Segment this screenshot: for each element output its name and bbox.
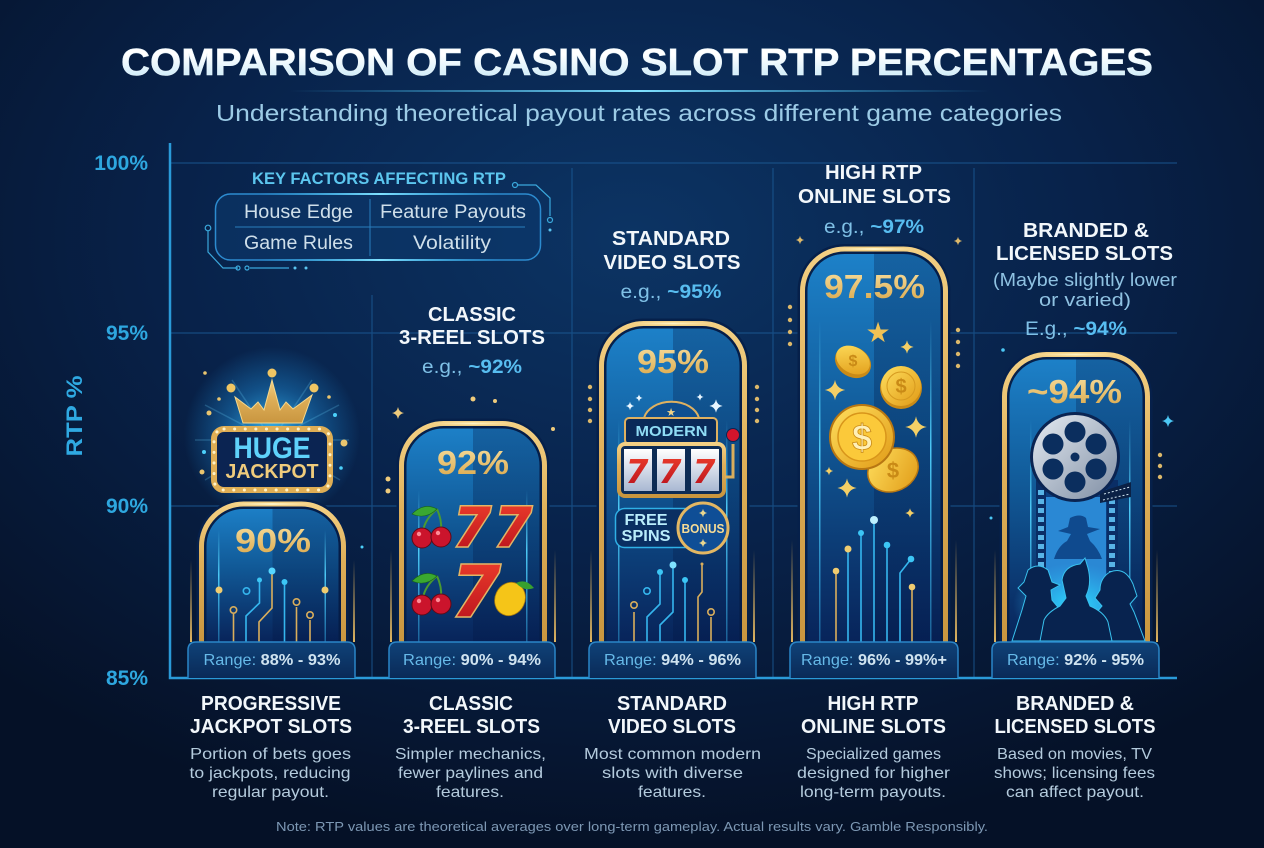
- bar ~94%: [990, 348, 1174, 647]
- heading: or varied): [1039, 290, 1131, 310]
- description: designed for higher: [797, 765, 951, 782]
- heading: E.g., ~94%: [1025, 319, 1127, 340]
- icon: gold coins and stars: ★: [865, 317, 891, 348]
- description: regular payout.: [212, 784, 329, 801]
- description: features.: [436, 784, 504, 801]
- bar 90%: [190, 503, 355, 642]
- category label: PROGRESSIVE: [201, 693, 341, 715]
- icon: slot machine: [619, 393, 740, 496]
- icon: slot machine: 7: [626, 452, 649, 491]
- heading: CLASSIC: [428, 304, 516, 326]
- axis label 95%: 95%: [106, 322, 148, 345]
- icon: free spins badge: [616, 503, 728, 553]
- icon: gold coins and stars: [825, 317, 927, 518]
- value 92%: 92%: [437, 444, 509, 481]
- heading: LICENSED SLOTS: [996, 243, 1173, 265]
- category label: 3-REEL SLOTS: [403, 716, 540, 738]
- bar 95%: [588, 322, 759, 642]
- icon: gold coins and stars: $: [895, 376, 907, 398]
- heading: [399, 304, 545, 378]
- column 4: high rtp online slots: [788, 162, 962, 801]
- category label: LICENSED SLOTS: [994, 716, 1156, 738]
- value 90%: 90%: [235, 522, 311, 559]
- value 97.5%: 97.5%: [824, 268, 925, 305]
- icon: gold coins and stars: $: [887, 458, 899, 483]
- icon: film strip: [1036, 480, 1131, 619]
- factor volatility: Volatility: [413, 233, 492, 254]
- description: Based on movies, TV: [997, 746, 1152, 763]
- range box 94-96: Range: 94% - 96%: [604, 652, 741, 669]
- column 1: progressive jackpot slots: [184, 347, 364, 801]
- icon: huge jackpot crown and marquee: JACKPOT: [226, 461, 318, 483]
- icon: slot machine: ★: [666, 407, 676, 419]
- icon: slot machine: 7: [693, 452, 716, 491]
- circuit decoration: [833, 516, 915, 642]
- icon: slot machine: MODERN: [636, 423, 708, 440]
- panel: key factors: [205, 170, 552, 270]
- description: slots with diverse: [602, 765, 743, 782]
- icon: big seven: 7: [452, 551, 501, 633]
- heading: e.g., ~97%: [824, 217, 924, 238]
- category label: [190, 693, 352, 738]
- range box 88-93: Range: 88% - 93%: [204, 652, 340, 669]
- description: [395, 746, 546, 801]
- category label: CLASSIC: [429, 693, 513, 715]
- heading: VIDEO SLOTS: [604, 252, 740, 274]
- description: to jackpots, reducing: [190, 765, 350, 782]
- key factors box: [216, 194, 540, 260]
- key factors heading: KEY FACTORS AFFECTING RTP: [252, 170, 506, 188]
- heading: [993, 220, 1177, 340]
- category label: [994, 693, 1156, 738]
- description: shows; licensing fees: [994, 765, 1155, 782]
- subtitle: Understanding theoretical payout rates across different game categories: [216, 100, 1062, 126]
- heading: [604, 228, 740, 303]
- icon: lemon: [489, 577, 534, 621]
- icon: free spins badge: SPINS: [622, 528, 671, 545]
- icon: free spins badge: BONUS: [682, 522, 724, 536]
- description: can affect payout.: [1006, 784, 1144, 801]
- description: features.: [638, 784, 706, 801]
- icon: huge jackpot crown and marquee: HUGE: [234, 432, 310, 465]
- icon: cherries top: [412, 506, 451, 548]
- factor game rules: Game Rules: [244, 233, 353, 254]
- bar 97.5%: [788, 236, 962, 642]
- heading: [798, 162, 951, 238]
- category label: [608, 693, 736, 738]
- icon: seven left: 7: [453, 496, 491, 559]
- heading: STANDARD: [612, 228, 730, 250]
- icon: slot machine: 7: [659, 452, 682, 491]
- category label: BRANDED &: [1016, 693, 1134, 715]
- heading: HIGH RTP: [825, 162, 922, 184]
- icon: huge jackpot crown and marquee: [184, 347, 364, 548]
- range box 88-93: [188, 642, 355, 678]
- description: [797, 746, 951, 801]
- column 2: classic 3-reel slots: [386, 304, 556, 801]
- icon: free spins badge: FREE: [624, 512, 668, 529]
- description: [994, 746, 1155, 801]
- value ~94%: ~94%: [1027, 373, 1122, 410]
- factor house edge: House Edge: [244, 202, 353, 223]
- category label: [403, 693, 540, 738]
- category label: JACKPOT SLOTS: [190, 716, 352, 738]
- range box 92-95: [992, 642, 1159, 678]
- description: Portion of bets goes: [190, 746, 351, 763]
- range box 96-99+: [790, 642, 958, 678]
- bar 92%: [386, 396, 556, 642]
- icon: seven right: 7: [494, 496, 532, 559]
- range box 96-99+: Range: 96% - 99%+: [801, 652, 947, 669]
- heading: 3-REEL SLOTS: [399, 327, 545, 349]
- factor feature payouts: Feature Payouts: [380, 202, 526, 223]
- heading: e.g., ~95%: [620, 282, 722, 303]
- title: COMPARISON OF CASINO SLOT RTP PERCENTAGES: [121, 42, 1153, 84]
- description: [190, 746, 351, 801]
- y axis: [62, 143, 1177, 690]
- category label: ONLINE SLOTS: [801, 716, 946, 738]
- range box 90-94: [389, 642, 555, 678]
- description: [584, 746, 761, 801]
- axis label 85%: 85%: [106, 667, 148, 690]
- description: Most common modern: [584, 746, 761, 763]
- axis title: RTP %: [62, 376, 87, 456]
- column 3: standard video slots: [584, 228, 761, 801]
- footnote: Note: RTP values are theoretical averages over long-term gameplay. Actual results vary. Gamble Responsibly.: [276, 820, 988, 834]
- range box 94-96: [589, 642, 756, 678]
- column 5: branded and licensed slots: [990, 220, 1177, 801]
- description: fewer paylines and: [398, 765, 543, 782]
- description: Simpler mechanics,: [395, 746, 546, 763]
- category label: VIDEO SLOTS: [608, 716, 736, 738]
- heading: BRANDED &: [1023, 220, 1149, 242]
- axis label 100%: 100%: [94, 152, 148, 175]
- icon: film reel: [1030, 412, 1120, 502]
- axis label 90%: 90%: [106, 495, 148, 518]
- category label: HIGH RTP: [828, 693, 918, 715]
- circuit decoration: [631, 562, 714, 642]
- heading: e.g., ~92%: [422, 357, 522, 378]
- icon: audience silhouettes: [1012, 558, 1145, 647]
- description: Specialized games: [806, 746, 941, 763]
- range box 92-95: Range: 92% - 95%: [1007, 652, 1144, 669]
- heading: (Maybe slightly lower: [993, 270, 1177, 290]
- icon: gold coins and stars: $: [852, 417, 872, 458]
- category label: [801, 693, 946, 738]
- circuit decoration: [216, 530, 328, 642]
- category label: STANDARD: [617, 693, 727, 715]
- description: long-term payouts.: [800, 784, 946, 801]
- range box 90-94: Range: 90% - 94%: [403, 652, 541, 669]
- icon: cherries bottom: [412, 573, 451, 615]
- heading: ONLINE SLOTS: [798, 186, 951, 208]
- icon: gold coins and stars: $: [849, 353, 858, 370]
- value 95%: 95%: [637, 343, 709, 380]
